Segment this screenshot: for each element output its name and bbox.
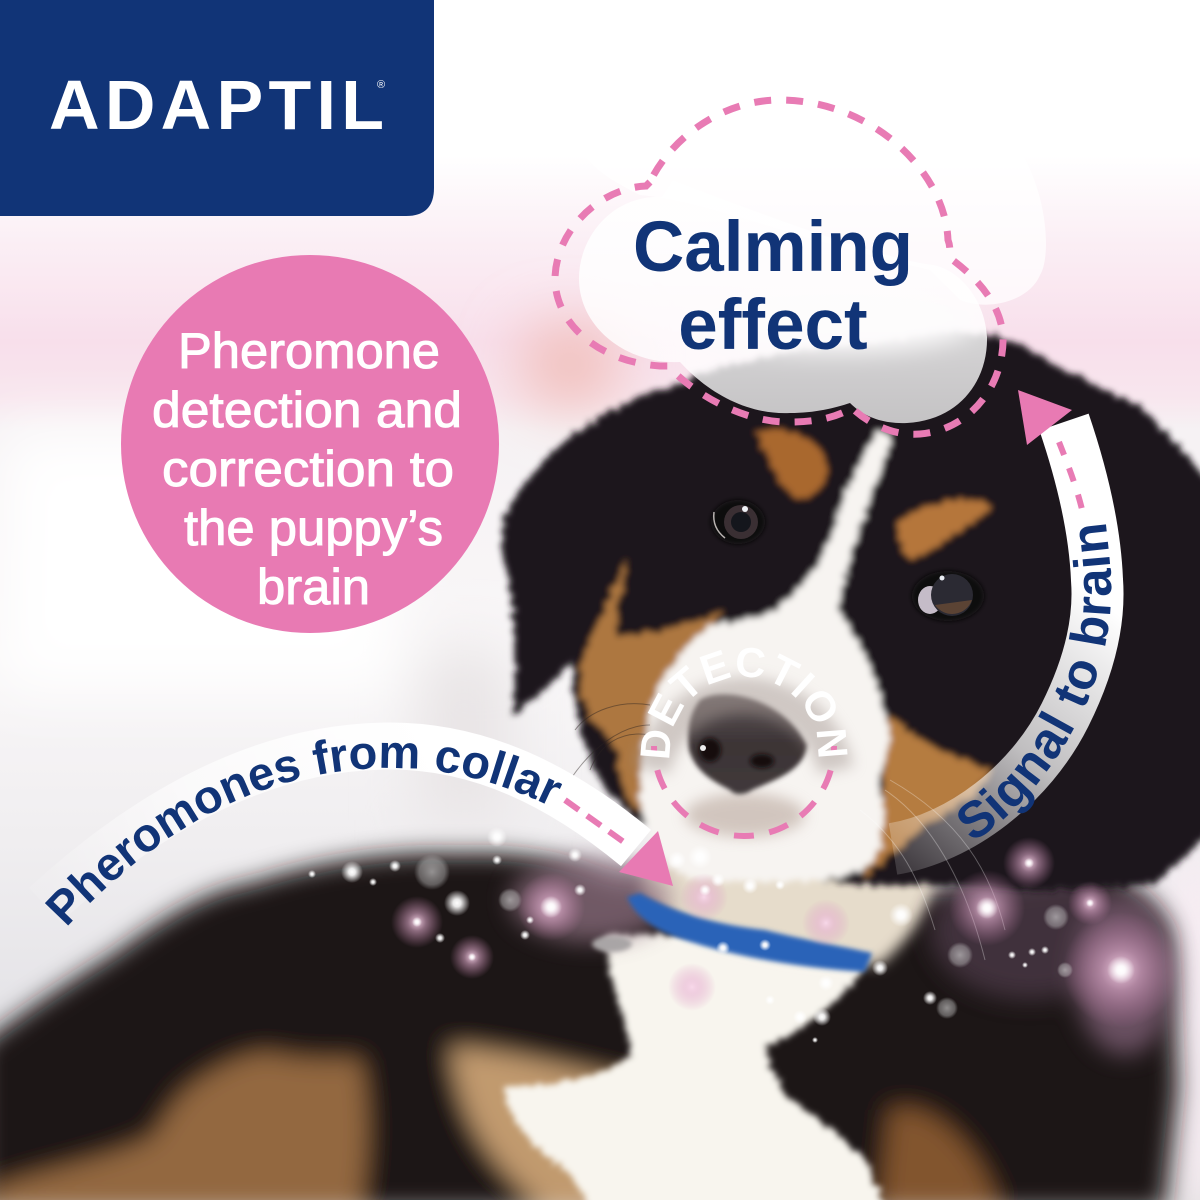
pink circle callout: detection and [152,382,462,438]
arrow: signal to brain [888,390,1124,874]
detection circle [632,648,857,839]
nose [688,694,807,794]
heading: calming effect [633,208,913,365]
registered mark: ® [377,79,385,91]
puppy neck fur [640,850,936,965]
tan cheek left [581,560,725,812]
fluff under collar [592,936,632,952]
arrow: signal to brain: Signal to brain [958,524,1112,838]
pheromone sparkles [308,827,1179,1043]
eye right [912,571,984,621]
pink body haze [510,858,1175,1055]
calming cloud [579,180,987,423]
puppy body [0,852,1178,1200]
white blaze and muzzle [640,432,892,883]
heading: calming effect: Calming [633,208,913,287]
logo panel [0,0,434,216]
detection circle: DETECTION [640,648,848,758]
heading: calming effect: effect [678,286,868,365]
pink circle callout [121,255,499,633]
eyebrow tan [757,430,828,499]
whiskers [860,780,1005,960]
whiskers dark [570,704,650,780]
collar [627,893,872,972]
background blur: soft room tones [0,323,1200,1200]
white chest [505,934,895,1200]
puppy head [502,332,1200,890]
pink circle callout: correction to [162,441,454,497]
tan patch left [0,1053,367,1200]
tan cheek right [862,715,992,878]
pink circle callout: Pheromone [178,323,440,379]
pink circle callout: brain [257,559,370,615]
muzzle shadow [685,793,805,837]
nostrils [699,738,774,768]
tan patch right [880,1108,1000,1200]
arrow: pheromones from collar: Pheromones from collar [44,739,562,926]
puppy photo illustration [0,332,1200,1200]
faint upper cloud [575,99,1046,305]
tan patch chest [451,1047,640,1200]
eye left [711,500,765,544]
soft fur under cloud [695,292,975,352]
logo text: ADAPTIL [49,66,384,144]
pink circle callout: the puppy’s [184,500,443,556]
dashed cloud outline [555,100,1003,434]
nose glint [700,745,706,751]
